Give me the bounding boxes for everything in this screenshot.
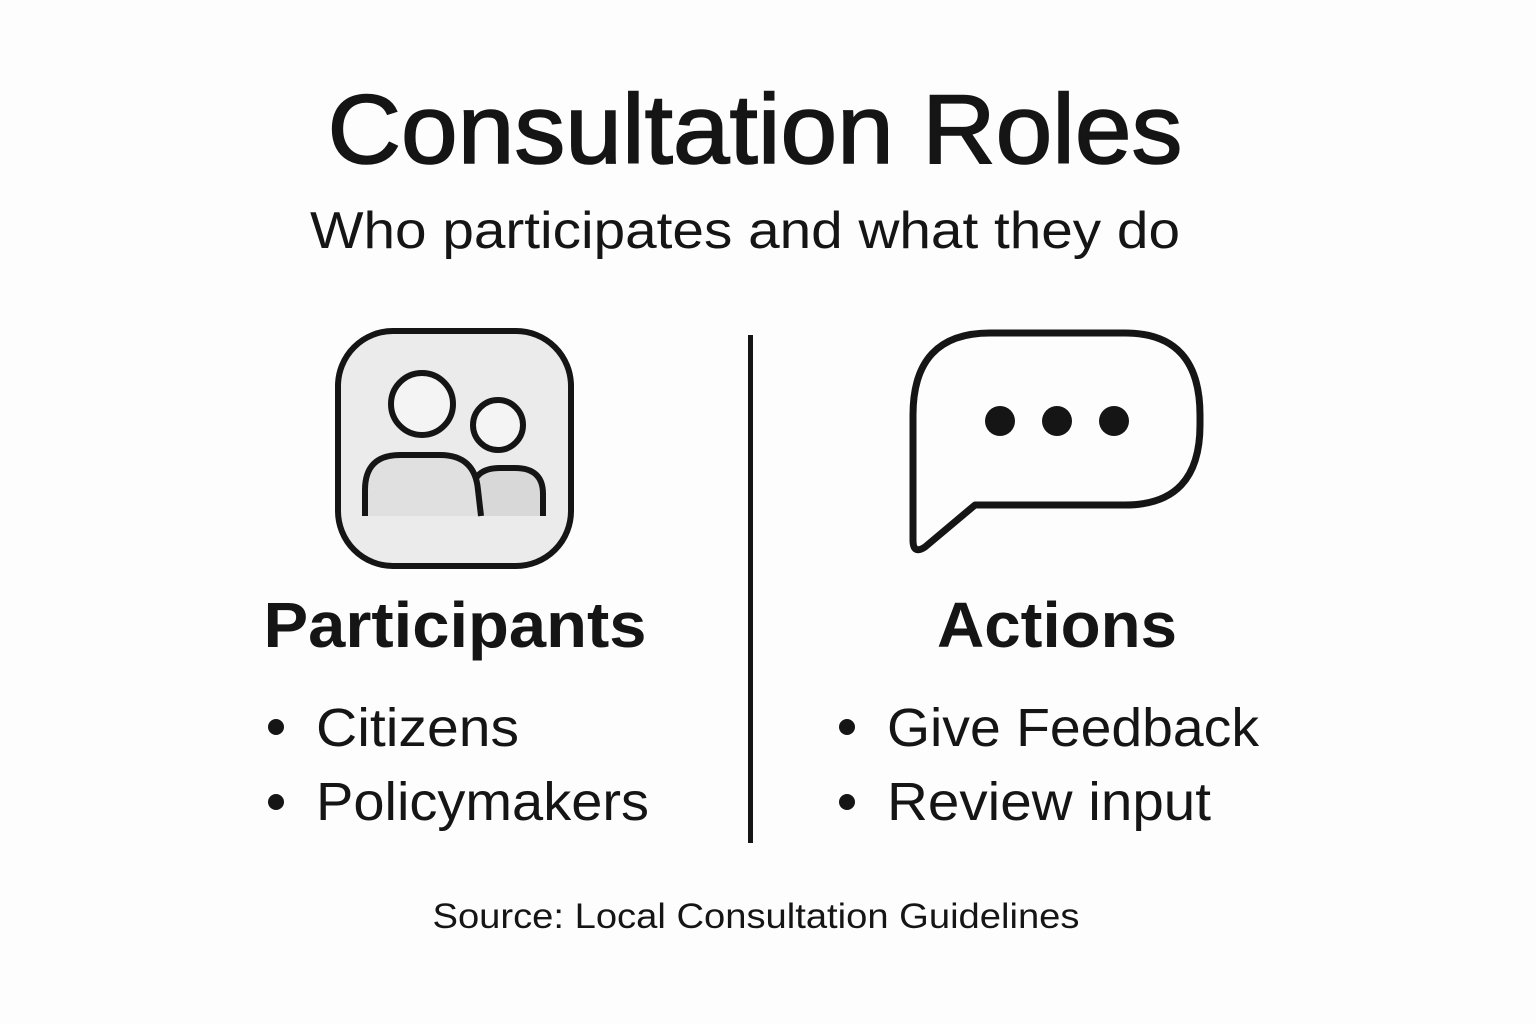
heading: participants: Participants [264,589,646,661]
icon: speech bubble [913,333,1200,550]
list: actions: Give Feedback [887,698,1260,758]
subtitle: Who participates and what they do [310,202,1180,260]
list: participants [268,698,649,832]
heading: actions: Actions [937,589,1177,661]
source: Source: Local Consultation Guidelines [432,897,1080,936]
list: participants: Citizens [316,698,519,758]
list: actions [839,698,1260,832]
icon: participants [338,331,571,566]
divider line [748,335,753,843]
list: participants: Policymakers [316,772,649,832]
title: Consultation Roles [328,74,1182,184]
list: actions: Review input [887,772,1211,832]
